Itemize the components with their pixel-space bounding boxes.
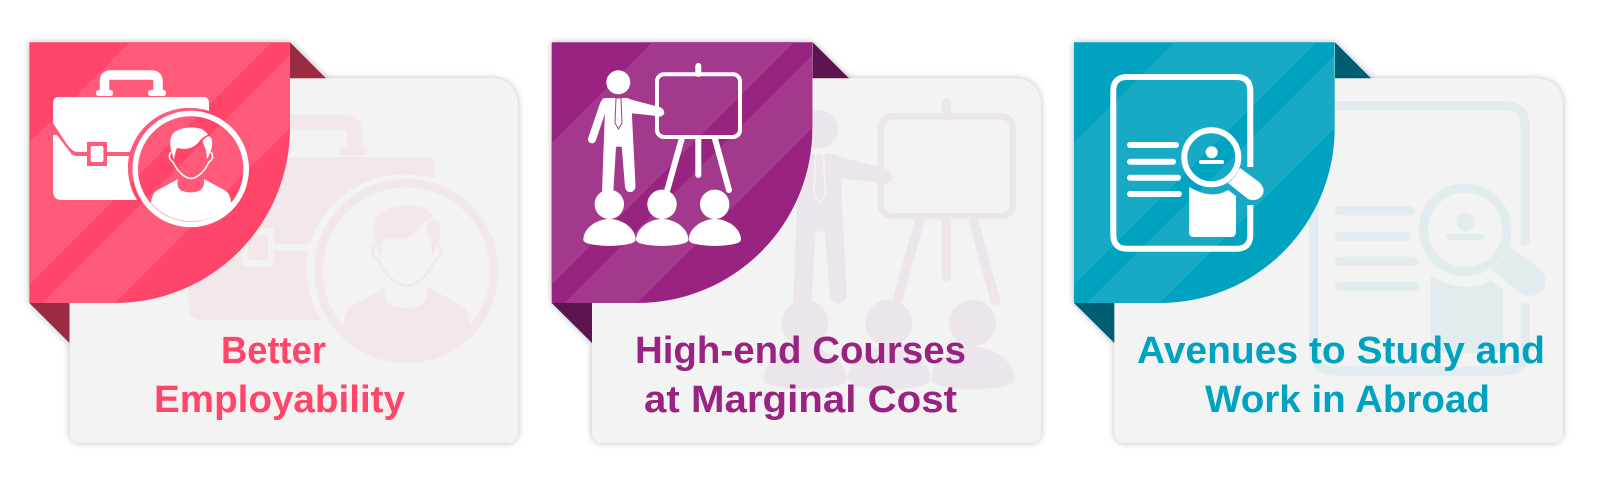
ribbon fold top — [290, 42, 326, 78]
icon: faded briefcase watermark — [188, 122, 494, 359]
ribbon fold bottom — [552, 303, 592, 343]
card background — [1114, 78, 1563, 443]
ribbon — [1074, 42, 1335, 303]
ribbon outer shadow — [552, 42, 849, 343]
heading: better employability — [154, 330, 405, 421]
ribbon — [552, 42, 812, 303]
ribbon fold top — [813, 42, 849, 78]
heading: avenues to study and work in abroad: Work in Abroad — [1205, 379, 1490, 421]
ribbon fold bottom — [1074, 303, 1114, 343]
ribbon outer shadow — [29, 42, 326, 343]
icon: faded document watermark — [1314, 106, 1546, 371]
heading: high-end courses at marginal cost: at Marginal Cost — [644, 379, 957, 421]
icon: faded presenter watermark — [764, 103, 1014, 389]
heading: avenues to study and work in abroad: Avenues to Study and — [1137, 330, 1545, 372]
ribbon outer shadow — [1074, 42, 1371, 343]
card background — [592, 78, 1041, 443]
heading: high-end courses at marginal cost: High-end Courses — [635, 330, 966, 372]
ribbon fold top — [1335, 42, 1371, 78]
icon: presenter with audience — [583, 66, 741, 246]
heading: avenues to study and work in abroad — [1137, 330, 1545, 421]
heading: high-end courses at marginal cost — [635, 330, 966, 421]
panel: high-end courses — [548, 38, 1045, 447]
heading: better employability: Employability — [154, 379, 405, 421]
ribbon fold bottom — [29, 303, 70, 343]
icon: briefcase with person — [53, 75, 246, 224]
panel: better employability — [26, 38, 522, 447]
heading: better employability: Better — [221, 330, 326, 372]
icon: document with magnifier — [1113, 77, 1264, 249]
ribbon — [29, 42, 290, 303]
panel: avenues abroad — [1070, 38, 1567, 447]
card background — [70, 78, 518, 443]
